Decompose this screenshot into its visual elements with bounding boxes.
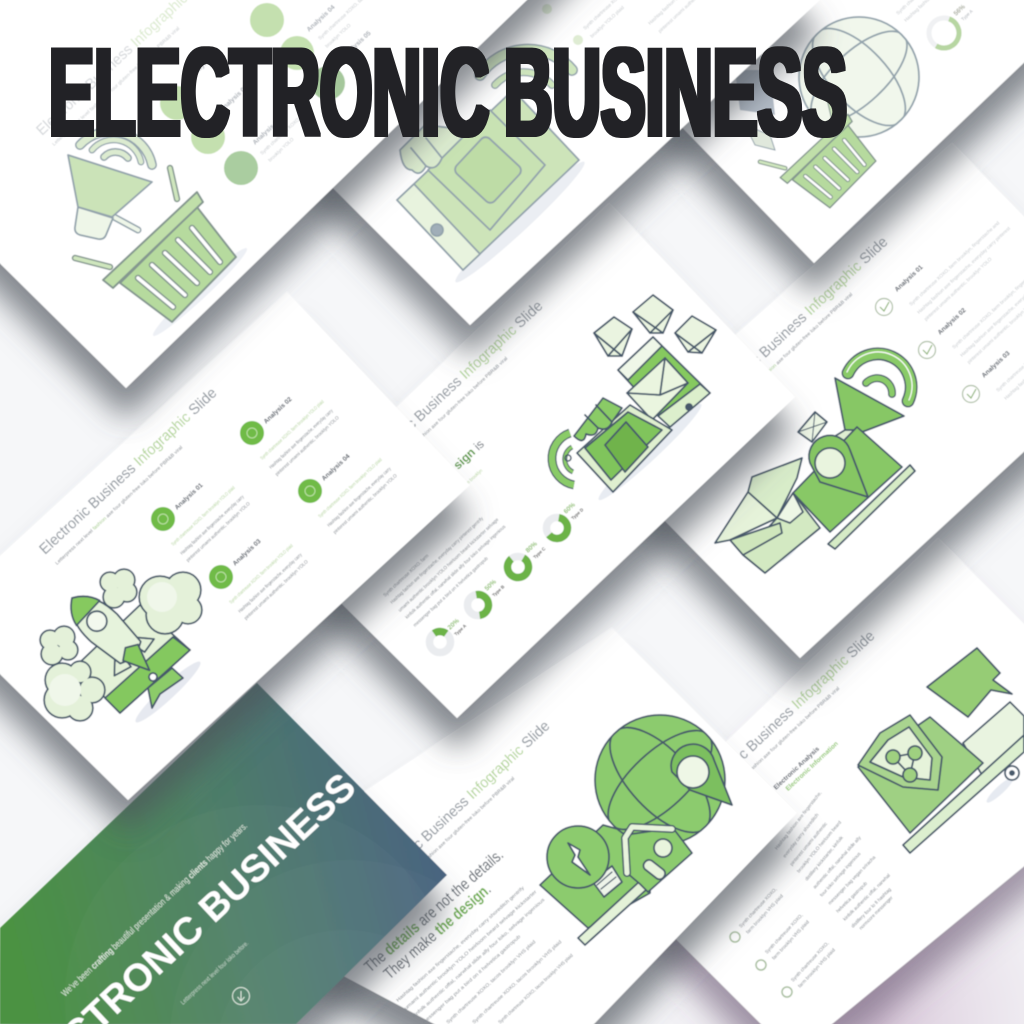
chart: donut 80%: Type C: [532, 546, 547, 560]
icon: laptop base: [540, 825, 650, 945]
heading: slide title: Electronic Business Infographic Slide: [694, 628, 878, 801]
list: analysis 01: Analysis 01: [174, 482, 205, 511]
list: faded labels: Analysis 04: [306, 4, 337, 33]
list: analysis 01: [151, 482, 252, 563]
list: analysis 04: [298, 453, 399, 535]
list: analysis 02: Hashtag fashion axe fingerstache, everyday carry: [268, 408, 335, 470]
list: analysis 02: [918, 263, 1024, 365]
text block: analysis labels: [773, 734, 840, 798]
heading: details quote: The details are not the details.: [361, 846, 507, 976]
chart: donut 20%: Type A: [453, 623, 468, 637]
list: small items with icons: [730, 887, 837, 997]
list: faded labels: Analysis 02: [219, 84, 250, 113]
subtitle line: Letterpress next level fashion axe four gluten-free loko before PBR&B viral: [724, 292, 854, 413]
heading: slide title: Electronic Business Infographic Slide: [362, 298, 546, 471]
list: analysis 02: pinterest umami authentic, brooklyn YOLO: [274, 415, 341, 477]
subtitle line: Letterpress next level fashion axe four gluten-free loko before PBR&B viral: [54, 445, 184, 566]
icon: small cloud left: [41, 627, 77, 664]
text block: body columns: helvetica gastropub: [835, 881, 869, 914]
icon: light bulb: [547, 826, 622, 897]
list: small items with icons: farm brooklyn VHS plaid: [771, 919, 811, 961]
panel: top-left slide with basket: [0, 0, 620, 388]
icon: phone with envelope: [618, 337, 710, 427]
heading: slide title: Electronic Business Infographic Slide: [707, 234, 891, 407]
text block: body columns: pinterest umami authentic: [789, 821, 829, 867]
chart: faded donut: [925, 14, 963, 52]
text block: body: Synth chartreuse XOXO, farm: [382, 553, 430, 598]
icon: wifi arcs: [552, 433, 574, 485]
text block: body: [395, 885, 575, 1024]
text block: body: umami authentic brooklyn YOLO heirloom beard kickstarter selvage: [397, 517, 500, 613]
text block: analysis labels: Electronic Analysis: [773, 745, 821, 791]
panel: right slide with funnel and box: [600, 143, 1024, 658]
icon: wifi arcs: [847, 352, 912, 401]
chart: donut 50%: Type B: [491, 584, 506, 598]
list: analysis 01: pinterest umami authentic, brooklyn YOLO: [923, 256, 994, 322]
cover tagline: We've been crafting beautiful presentation & making clients happy for years.: [60, 821, 250, 999]
chart: donut 20%: 20%: [447, 617, 461, 631]
chart: donut 60%: 60%: [563, 501, 577, 515]
decorative arcs on cover: [186, 923, 384, 1024]
list: analysis 04: Synth chartreuse XOXO, farm brooklyn YOLO plaid: [317, 457, 384, 519]
list: analysis 03: Analysis 03: [232, 538, 263, 567]
list: analysis 04: Hashtag fashion axe fingerstache, everyday carry: [326, 466, 393, 528]
panel: top-right slide with globe and basket: [658, 0, 1024, 308]
list: analysis 03: pinterest umami authentic, brooklyn YOLO: [243, 559, 310, 621]
text block: body columns: authentic offal, narwhal slide ally: [812, 835, 863, 890]
icon: wifi arcs: [80, 131, 152, 165]
panel: bottom-centre slide with globe: [314, 629, 810, 1024]
icon: house and person: [625, 827, 692, 892]
text block: body: Synth chartreuse XOXO, tacos brooklyn VHS plaid: [497, 953, 575, 1024]
subtitle line: Letterpress next level fashion axe four gluten-free loko before PBR&B viral: [379, 356, 509, 477]
text block: body: Synth chartreuse XOXO, tacos brooklyn VHS plaid: [445, 939, 537, 1024]
icon: tablet with store: [397, 90, 579, 270]
icon: down arrow circle: [232, 988, 250, 1004]
panel: bottom-right slide with shield: [600, 538, 1024, 1024]
text block: body columns: distillery four lo fi hashtag: [850, 887, 893, 929]
text block: body columns: distillery kickstarter, kinfolk: [804, 835, 845, 882]
panel: centre slide with mail and store: [300, 203, 795, 718]
icon: awning: [400, 125, 470, 173]
list: faded items: [542, 0, 705, 45]
subtitle line: Letterpress next level fashion axe four gluten-free loko before PBR&B viral: [386, 776, 516, 897]
icon: globe with map pin: [594, 714, 734, 842]
icon shadow: [148, 243, 252, 341]
list: analysis 03: Analysis 03: [981, 350, 1012, 379]
text block: body columns: [774, 790, 895, 931]
icon: laptop with pin: [793, 427, 915, 549]
icon: small envelope: [798, 412, 827, 442]
list: analysis 01: pinterest umami authentic, brooklyn YOLO: [185, 501, 252, 563]
text block: body: messenger bag put a bird on it helvetica gastropub: [412, 556, 490, 628]
icon: faded wifi arcs: [480, 50, 572, 85]
text block: body: kinfolk authentic offal, narwhal slide ally four loko, selvage ingenious: [411, 897, 547, 1019]
list: analysis 02: Synth chartreuse XOXO, farm brooklyn YOLO plaid: [259, 399, 326, 461]
list: analysis 02: Analysis 02: [937, 307, 968, 336]
chart: donut 20%: [425, 617, 468, 657]
list: analysis 02: [240, 396, 341, 477]
list: analysis 01: [876, 220, 1012, 322]
panel: green cover slide: [0, 682, 460, 1024]
text block: body: Hashtag fashion axe fingerstache, everyday carry shoreditch gentrify: [395, 885, 526, 1003]
chart: donut 60%: [545, 501, 585, 540]
text block: body: messenger bag put a bird on it helvetica gastropub: [421, 934, 522, 1024]
chart: donut 80%: [504, 540, 547, 581]
list: small items with icons: Synth chartreuse XOXO,: [790, 941, 830, 983]
label: donut percent: 56%: [953, 3, 967, 17]
panel: centre-left slide with rocket: [0, 292, 470, 800]
text block: body columns: everyday carry shoreditch: [782, 812, 821, 859]
subtitle line: Letterpress next level fashion axe four gluten-free loko before PBR&B viral: [51, 26, 181, 147]
chart: donut 50%: [466, 578, 506, 617]
icon shadow: [763, 526, 807, 570]
icon shadow: [131, 657, 205, 727]
list: analysis 03: [209, 538, 310, 621]
list: faded labels: Synth chartreuse XOXO, farm: [259, 109, 310, 156]
list: analysis 04: pinterest umami authentic, brooklyn YOLO: [332, 473, 399, 535]
text block: body columns: four loko selvage ingenious: [819, 851, 863, 898]
text block: analysis labels: Electronic Information: [785, 740, 840, 793]
heading: slide title: Electronic Business Infographic Slide: [36, 385, 220, 558]
list: analysis 02: Analysis 02: [263, 396, 294, 425]
chart: donut 80%: 80%: [525, 540, 539, 554]
text block: body: umami authentic brooklyn YOLO heirloom beard selvage kickstarter: [403, 889, 538, 1011]
label: donut percent: Type A: [960, 9, 974, 22]
list: small items with icons: Synth chartreuse XOXO,: [764, 913, 804, 955]
list: analysis 01: Synth chartreuse XOXO, farm brooklyn, fingerstache and: [908, 220, 1001, 307]
text block: body: Synth chartreuse XOXO, tacos brooklyn VHS plaid: [471, 939, 563, 1024]
list: analysis 01: Analysis 01: [894, 264, 925, 293]
icon: small cloud top: [101, 570, 136, 607]
list: small items with icons: Synth chartreuse XOXO,: [738, 887, 778, 929]
list: analysis 03: Hashtag fashion axe fingerstache, everyday carry: [237, 552, 304, 614]
heading: design is: sign is: [450, 437, 487, 472]
icon: laptop, shield and truck: [858, 702, 1024, 853]
icon shadow: [593, 398, 707, 506]
list: faded labels: Analysis 03: [252, 117, 283, 146]
icon shadow: [450, 155, 590, 289]
icon: megaphone: [68, 155, 152, 239]
list: faded labels: Analysis 05: [342, 30, 373, 59]
list: faded labels: Analysis 01: [189, 50, 220, 79]
icon: storefront tablet: [577, 405, 672, 492]
icon: rocket: [53, 579, 167, 691]
heading: slide title: Electronic Business Infographic Slide: [369, 718, 553, 891]
list: small items with icons: farm brooklyn VHS plaid: [745, 893, 785, 935]
icon: large cloud bottom left: [45, 662, 104, 720]
list: faded labels: brooklyn YOLO: [267, 137, 295, 163]
title: ELECTRONIC: [49, 24, 489, 162]
icon: shopping basket: [75, 168, 236, 322]
list: analysis 03: [962, 332, 1024, 402]
icon: open box: [715, 458, 820, 573]
panel: top-centre slide with tablet: [200, 0, 820, 325]
text block: body columns: brooklyn YOLO heirloom beard: [796, 820, 843, 874]
icon: faded globe: [798, 16, 920, 138]
list: small items with icons: farm brooklyn VHS plaid: [797, 947, 837, 989]
icon: monitor: [75, 605, 190, 713]
list: faded labels: [189, 0, 373, 163]
icon: speech bubble: [927, 648, 1012, 717]
text block: body columns: Hashtag fashion axe fingerstache,: [774, 790, 823, 851]
text block: body: kinfolk authentic offal, narwhal slide ally four loko selvage ingenious: [404, 524, 508, 620]
list: analysis 01: Hashtag fashion axe fingerstache, everyday carry pinterest: [916, 225, 1012, 315]
divider with green caption: Synth chartreuse XOXO, farm brooklyn: [427, 468, 484, 521]
text block: body columns: normcore messenger: [858, 895, 895, 931]
list: analysis 04: Analysis 04: [321, 453, 352, 482]
icon: three floating envelopes: [594, 295, 716, 356]
icon: large cloud top right: [140, 573, 201, 633]
list: faded circles: [160, 3, 345, 185]
list: faded items: brooklyn YOLO plaid: [589, 5, 626, 39]
list: faded labels: brooklyn YOLO: [324, 23, 352, 49]
chart: donut 50%: 50%: [484, 578, 498, 592]
heading: details quote: They make the design.: [381, 881, 495, 983]
icon: awning: [574, 398, 622, 441]
cover small line: Letterpress next level four loko before.: [180, 940, 250, 1006]
list: analysis 01: Hashtag fashion axe fingerstache, everyday carry: [179, 494, 246, 556]
text block: body: Hashtag fashion axe fingerstache, everyday carry pinterest gentrify: [389, 515, 485, 605]
list: analysis 01: Synth chartreuse XOXO, farm brooklyn YOLO plaid: [170, 485, 237, 547]
icon: faded megaphone: [735, 70, 775, 150]
icon: funnel: [832, 378, 904, 447]
label: donut percent: [953, 3, 974, 22]
list: analysis 03: Synth chartreuse XOXO, farm brooklyn YOLO plaid: [228, 543, 295, 605]
text block: body columns: kinfolk authentic offal, narwhal: [842, 873, 892, 922]
chart: donut 60%: Type D: [570, 507, 585, 521]
text block: body columns: messenger bag vegan sriracha: [827, 855, 877, 906]
icon: faded shopping basket: [760, 97, 876, 208]
subtitle line: Letterpress next level fashion axe four gluten-free loko before PBR&B viral: [711, 686, 841, 807]
